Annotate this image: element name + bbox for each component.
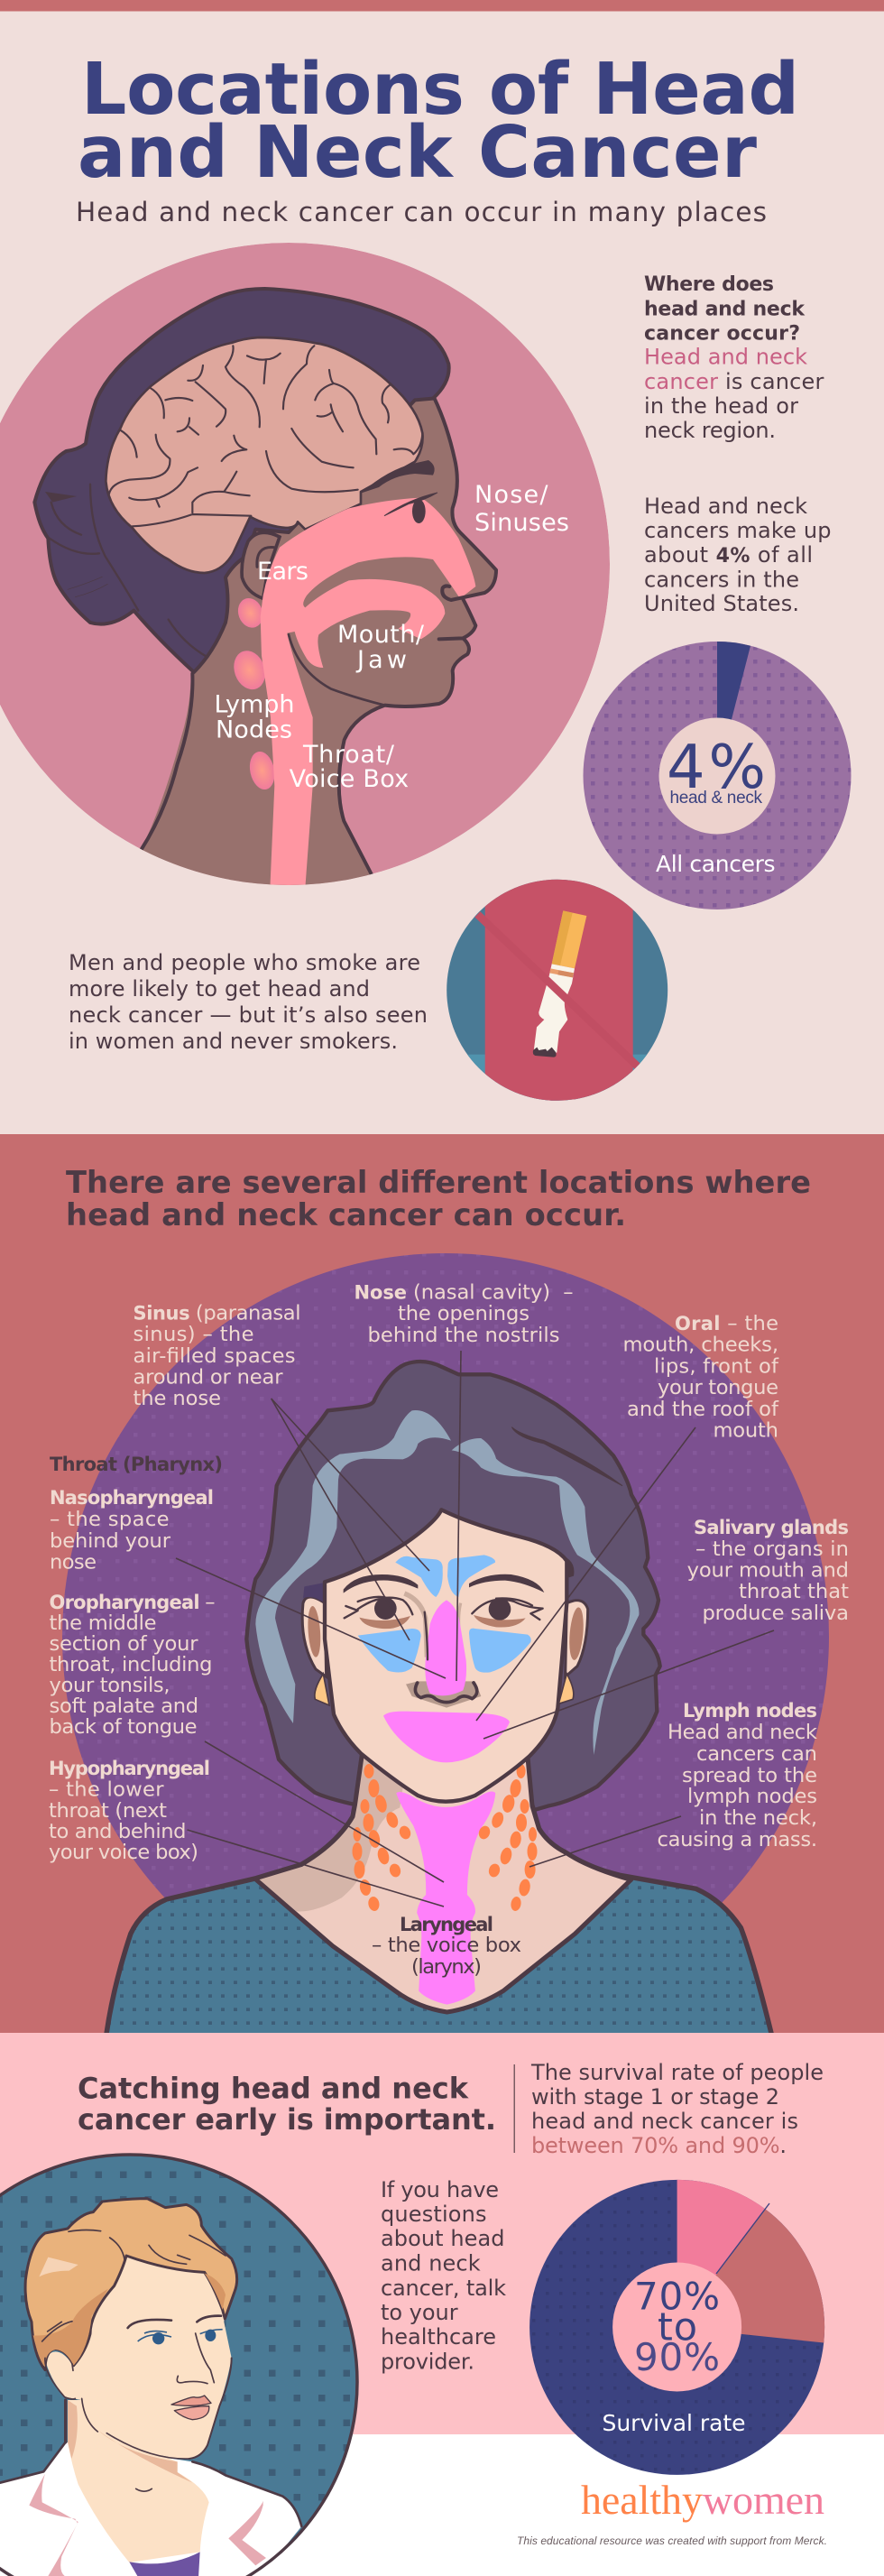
- text block: lymph nodes: spread to the: [682, 1764, 817, 1787]
- heading: catching early: cancer early is important.: [78, 2102, 496, 2137]
- text block: talk to provider: cancer, talk: [381, 2276, 506, 2301]
- top band: [0, 0, 884, 11]
- chart: survival donut: 90%: [634, 2335, 720, 2379]
- text block: oropharyngeal: [49, 1591, 215, 1739]
- text block: sinus: sinus) – the: [134, 1323, 254, 1346]
- text block: salivary glands: produce saliva: [702, 1602, 849, 1625]
- text block: 4 percent: Head and neck: [644, 494, 807, 519]
- illustration: doctor: [0, 2147, 361, 2576]
- text block: salivary glands: – the organs in: [695, 1537, 849, 1561]
- text block: lymph nodes: lymph nodes: [687, 1785, 817, 1808]
- text block: oral: Oral – the: [675, 1312, 778, 1335]
- text block: oropharyngeal: your tonsils,: [49, 1674, 170, 1697]
- text block: throat heading: Throat (Pharynx): [50, 1454, 223, 1475]
- text block: hypopharyngeal: your voice box): [49, 1841, 198, 1864]
- illustration: eyes and brows: [344, 1574, 418, 1593]
- title: and Neck Cancer: [78, 111, 757, 194]
- chart: 4 percent donut: All cancers: [656, 851, 776, 877]
- eyebrow: [361, 460, 435, 494]
- text block: laryngeal: Laryngeal: [400, 1914, 493, 1935]
- text block: laryngeal: (larynx): [411, 1955, 482, 1979]
- label: lymph nodes: [215, 691, 294, 744]
- label: mouth and jaw: Jaw: [355, 646, 407, 674]
- text block: oropharyngeal: soft palate and: [49, 1694, 198, 1718]
- heading: several locations: [66, 1165, 811, 1233]
- illustration: throat highlight: [396, 1791, 495, 2005]
- text block: nasopharyngeal: – the space: [50, 1508, 170, 1531]
- panel: locations: [0, 1134, 884, 2037]
- text block: sinus: Sinus (paranasal: [134, 1301, 301, 1325]
- subtitle: Head and neck cancer can occur in many places: [76, 197, 767, 227]
- illustration: nose and mouth highlight: [425, 1600, 466, 1695]
- text block: oropharyngeal: Oropharyngeal –: [49, 1591, 215, 1614]
- text block: where does it occur: neck region.: [644, 418, 776, 443]
- text block: nose: behind the nostrils: [368, 1324, 559, 1347]
- text block: risk factors: more likely to get head and: [69, 976, 370, 1002]
- text block: survival rate: with stage 1 or stage 2: [531, 2084, 779, 2110]
- text block: hypopharyngeal: – the lower: [49, 1778, 164, 1802]
- text block: oral: mouth: [713, 1418, 778, 1442]
- illustration: neck and shirt: [106, 1753, 772, 2037]
- text block: talk to provider: about head: [381, 2226, 505, 2251]
- chart: 4 percent donut: [583, 642, 852, 909]
- text block: where does it occur: head and neck: [644, 298, 806, 321]
- label: nose and sinuses: Sinuses: [474, 509, 569, 537]
- text block: nose: [354, 1281, 574, 1347]
- text block: risk factors: in women and never smokers.: [69, 1029, 398, 1054]
- text block: where does it occur: in the head or: [644, 393, 798, 419]
- text block: talk to provider: If you have: [381, 2177, 499, 2202]
- text block: survival rate: between 70% and 90%.: [531, 2133, 787, 2158]
- text block: oropharyngeal: back of tongue: [49, 1715, 197, 1739]
- label: nose and sinuses: Nose/: [474, 481, 548, 509]
- text block: lymph nodes: in the neck,: [699, 1806, 817, 1830]
- heading: several locations: There are several different locations where: [66, 1165, 811, 1200]
- panel: head profile illustration: [0, 243, 610, 896]
- label: throat and voice box: Voice Box: [290, 765, 409, 793]
- text block: laryngeal: – the voice box: [372, 1934, 521, 1957]
- illustration: lymph nodes: [352, 1764, 538, 1912]
- panel: early detection background: [0, 2033, 884, 2434]
- text block: risk factors: neck cancer — but it’s also seen: [69, 1002, 428, 1028]
- illustration: woman face: [302, 1510, 588, 1802]
- text block: lymph nodes: causing a mass.: [657, 1828, 817, 1851]
- text block: talk to provider: questions: [381, 2202, 487, 2227]
- text block: hypopharyngeal: throat (next: [49, 1799, 167, 1823]
- heading: catching early: Catching head and neck: [78, 2072, 469, 2106]
- chart: 4 percent donut: head & neck: [669, 789, 763, 808]
- text block: nose: the openings: [398, 1302, 529, 1325]
- text block: where does it occur: Head and neck: [644, 345, 807, 370]
- text block: nasopharyngeal: nose: [50, 1550, 97, 1574]
- text block: oropharyngeal: the middle: [49, 1611, 157, 1635]
- label: mouth and jaw: Mouth/: [337, 621, 425, 649]
- panel: intro background: [0, 0, 884, 1134]
- text block: survival rate: The survival rate of people: [530, 2060, 824, 2085]
- text block: salivary glands: throat that: [739, 1580, 849, 1603]
- footnote: This educational resource was created with support from Merck.: [517, 2534, 827, 2547]
- logo: healthywomen: healthywomen: [581, 2477, 824, 2523]
- text block: hypopharyngeal: [49, 1758, 210, 1864]
- face profile line: [339, 399, 496, 875]
- text block: lymph nodes: Head and neck: [668, 1721, 818, 1744]
- lymph nodes: [238, 598, 262, 628]
- text block: salivary glands: Salivary glands: [694, 1517, 849, 1538]
- text block: sinus: [134, 1301, 301, 1410]
- title: [78, 48, 799, 194]
- text block: hypopharyngeal: Hypopharyngeal: [49, 1758, 210, 1779]
- label: lymph nodes: Nodes: [216, 716, 292, 744]
- text block: nasopharyngeal: behind your: [50, 1529, 171, 1553]
- text block: oropharyngeal: section of your: [49, 1632, 198, 1656]
- text block: lymph nodes: [657, 1700, 818, 1851]
- text block: laryngeal: [372, 1914, 521, 1979]
- text block: nose: Nose (nasal cavity) –: [354, 1281, 574, 1305]
- label: lymph nodes: Lymph: [215, 691, 294, 718]
- chart: survival donut: 70%: [634, 2275, 720, 2319]
- text block: talk to provider: provider.: [381, 2350, 474, 2375]
- text block: 4 percent: about 4% of all: [644, 542, 813, 568]
- text block: 4 percent: United States.: [644, 591, 799, 616]
- text block: survival rate: [530, 2060, 824, 2158]
- text block: 4 percent: cancers make up: [644, 518, 832, 543]
- text block: talk to provider: [381, 2177, 506, 2375]
- text block: lymph nodes: Lymph nodes: [683, 1700, 817, 1722]
- text block: where does it occur: Where does: [644, 273, 774, 296]
- text block: oropharyngeal: throat, including: [49, 1653, 213, 1676]
- illustration: woman hair: [246, 1362, 660, 1811]
- pointer lines: [176, 1351, 774, 1907]
- text block: where does it occur: [644, 273, 824, 443]
- label: nose and sinuses: [474, 481, 569, 537]
- text block: nasopharyngeal: [50, 1487, 214, 1574]
- chart: 4 percent donut: 4%: [667, 732, 766, 802]
- chart: survival donut: [529, 2180, 824, 2475]
- label: mouth and jaw: [337, 621, 425, 674]
- text block: where does it occur: cancer occur?: [644, 322, 800, 345]
- brain: [106, 337, 423, 573]
- text block: lymph nodes: cancers can: [696, 1742, 817, 1766]
- text block: hypopharyngeal: to and behind: [49, 1820, 186, 1843]
- airway: [261, 498, 475, 896]
- heading: catching early: [78, 2072, 496, 2137]
- text block: survival rate: head and neck cancer is: [531, 2109, 798, 2134]
- text block: 4 percent: [644, 494, 832, 616]
- text block: oral: lips, front of: [654, 1354, 779, 1378]
- text block: sinus: the nose: [134, 1387, 221, 1410]
- text block: oral: and the roof of: [627, 1398, 779, 1421]
- chart: survival donut: Survival rate: [603, 2410, 745, 2436]
- text block: talk to provider: to your: [381, 2300, 458, 2325]
- text block: sinus: air-filled spaces: [134, 1344, 296, 1368]
- label: ears: Ears: [257, 558, 308, 586]
- text block: 4 percent: cancers in the: [644, 567, 799, 592]
- panel: white footer: [0, 2434, 884, 2576]
- illustration: sinuses: [358, 1555, 531, 1673]
- text block: salivary glands: your mouth and: [687, 1559, 849, 1583]
- text block: risk factors: Men and people who smoke are: [69, 950, 420, 975]
- text block: sinus: around or near: [134, 1366, 283, 1390]
- text block: salivary glands: [687, 1517, 849, 1625]
- label: throat and voice box: Throat/: [302, 741, 395, 769]
- text block: risk factors: [69, 950, 428, 1054]
- hair: [34, 289, 449, 672]
- text block: oral: your tongue: [658, 1376, 778, 1399]
- text block: oral: [622, 1312, 779, 1442]
- heading: several locations: head and neck cancer can occur.: [66, 1197, 626, 1233]
- label: throat and voice box: [290, 741, 409, 793]
- text block: talk to provider: healthcare: [381, 2324, 496, 2350]
- ear: [242, 532, 280, 598]
- chart: survival donut: to: [658, 2305, 697, 2350]
- text block: nasopharyngeal: Nasopharyngeal: [50, 1487, 214, 1509]
- text block: talk to provider: and neck: [381, 2250, 481, 2276]
- text block: where does it occur: cancer is cancer: [644, 369, 824, 394]
- text block: oral: mouth, cheeks,: [622, 1334, 778, 1357]
- icon: crossed out cigarette: [447, 879, 668, 1101]
- title: Locations of Head: [81, 48, 799, 131]
